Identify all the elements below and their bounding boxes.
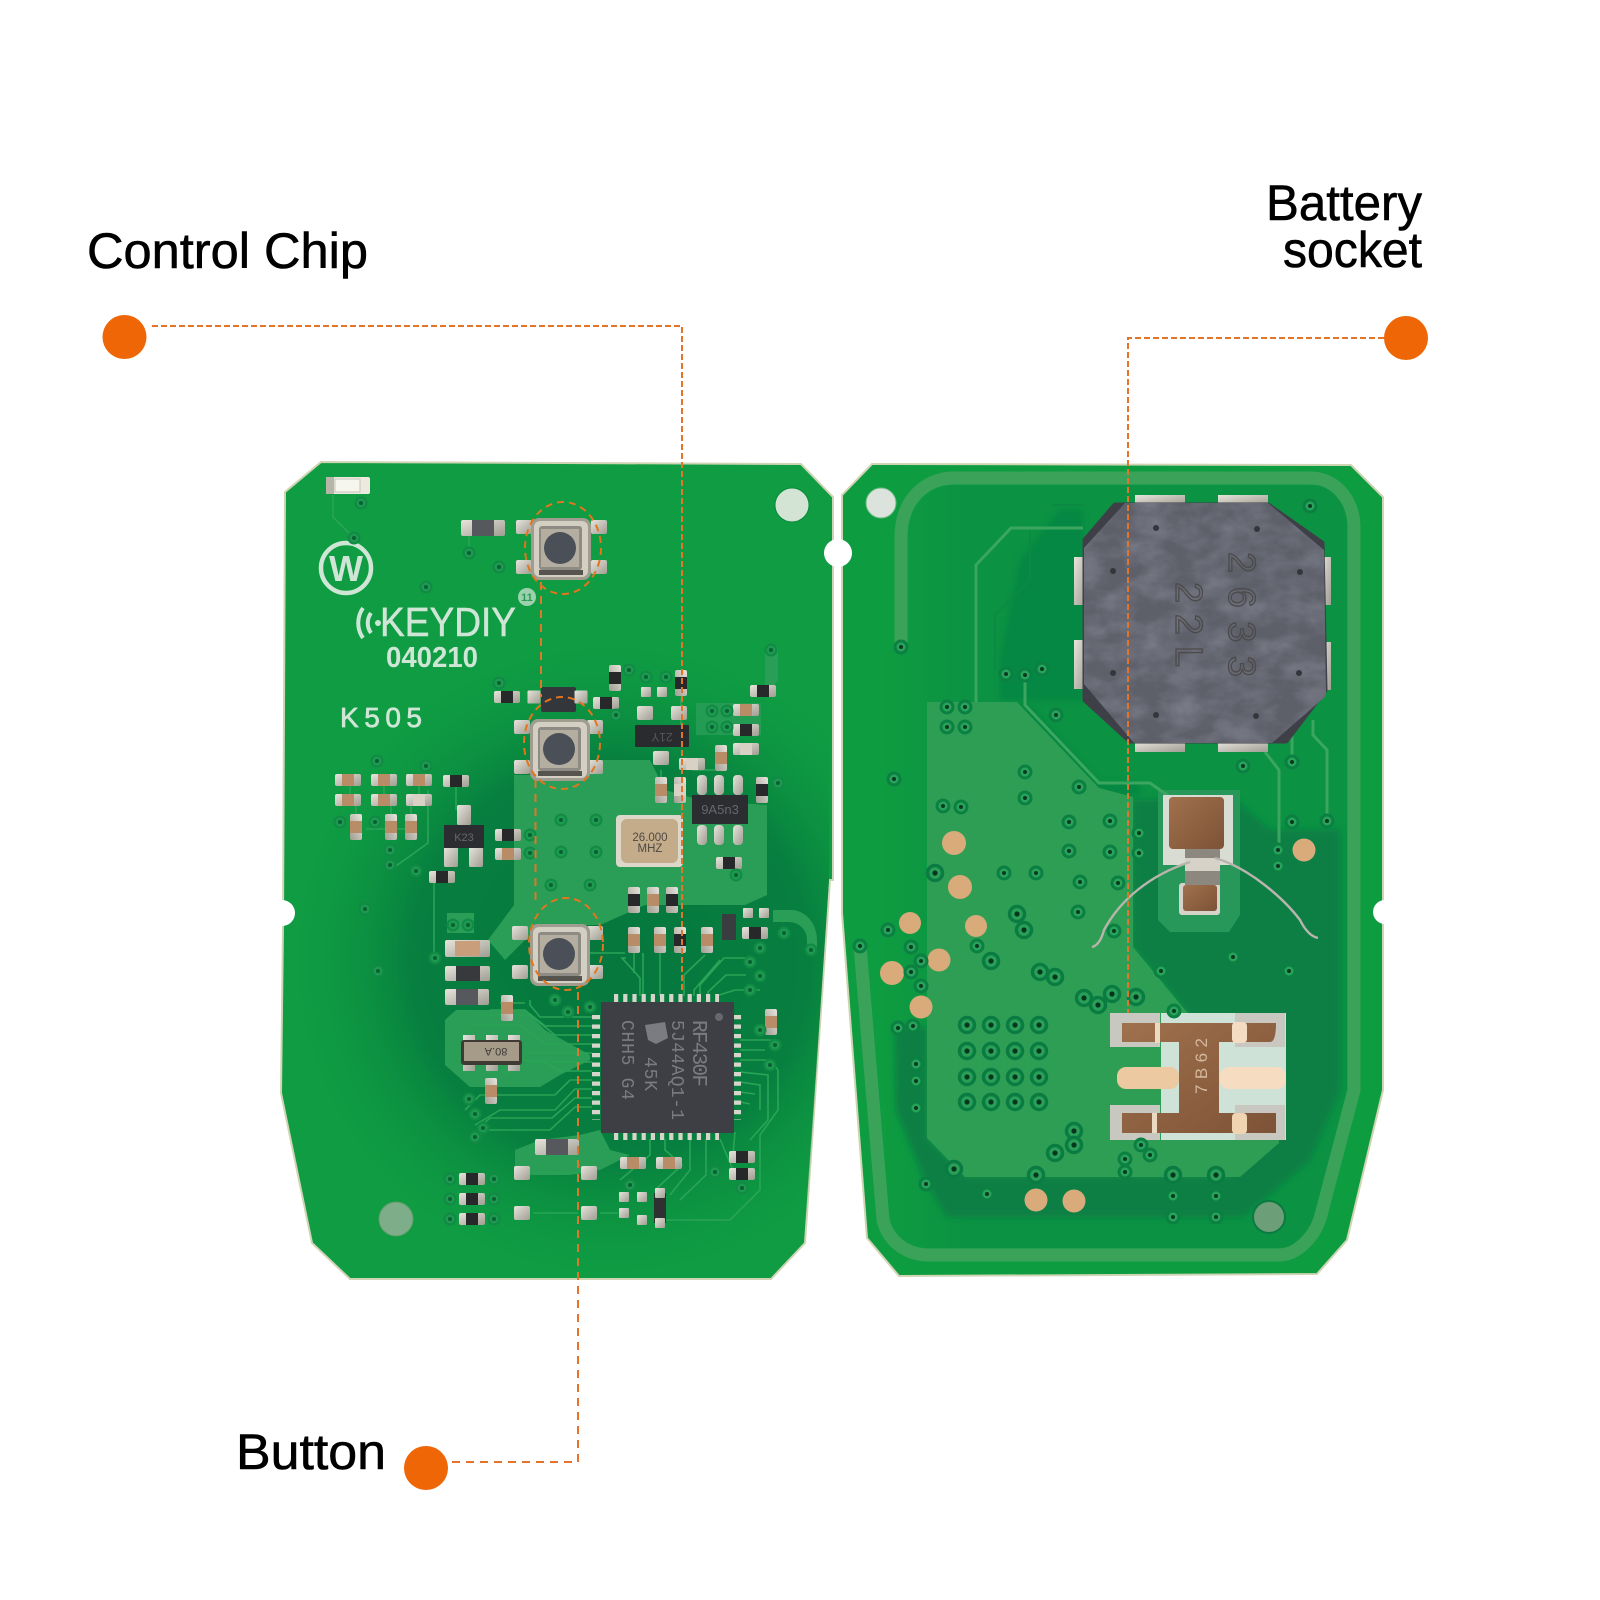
logo KEYDIY: 11: [521, 592, 533, 604]
model name K505: K505: [340, 702, 422, 733]
copper pour back: [927, 702, 1279, 1177]
battery cover: 2633: [1220, 552, 1262, 677]
hole top left: [866, 488, 896, 518]
dark copper shading: [283, 464, 831, 1277]
oscillator chip 9A5n3: 9A5n3: [701, 802, 739, 817]
copper pour areas: [445, 644, 817, 1175]
traces front: [333, 495, 778, 1220]
label: battery socket: Battery: [1266, 175, 1422, 231]
model number 040210: 040210: [386, 642, 478, 674]
logo W: W: [329, 548, 363, 589]
dot: button: [404, 1446, 448, 1490]
outer antenna track: [860, 478, 1354, 1255]
button 3: [512, 924, 603, 986]
label: battery socket: socket: [1283, 222, 1422, 278]
small crystal 80.A: 80.A: [484, 1045, 507, 1057]
via grid: [960, 1018, 1046, 1110]
battery cover: [1074, 495, 1331, 752]
label: control chip: Control Chip: [87, 223, 368, 279]
leader line: control chip: [152, 326, 682, 990]
dashed circles around buttons: [524, 502, 603, 990]
battery socket lower: 7B62: [1192, 1038, 1211, 1094]
dot: battery socket: [1384, 316, 1428, 360]
inner field: [866, 485, 1347, 1248]
logo KEYDIY: KEYDIY: [380, 599, 516, 645]
control chip RF430F: [596, 998, 737, 1136]
hole bottom right: [1253, 1201, 1285, 1233]
battery contact upper: [1092, 795, 1318, 947]
vias front: [334, 498, 816, 1224]
small crystal 80.A: [461, 1035, 522, 1071]
leader line: button links: [536, 582, 541, 905]
contact base pad: [1158, 790, 1240, 932]
board outline front: [281, 462, 833, 1279]
buttons: [512, 518, 607, 986]
battery socket lower: [1110, 1013, 1286, 1140]
crystal 26.000 MHZ: MHZ: [638, 843, 662, 855]
small components front: 21Y: [651, 730, 673, 744]
label: button: Button: [236, 1424, 386, 1480]
mounting holes front: [379, 488, 809, 1236]
mounting holes back: [866, 488, 1285, 1233]
small components front: [335, 520, 777, 1228]
board notches: [269, 539, 1397, 926]
button 2: [514, 719, 603, 781]
copper test points: [880, 831, 1316, 1212]
control chip RF430F: RF430F: [686, 1020, 709, 1087]
leader line: button: [452, 992, 578, 1462]
hole top right: [775, 488, 809, 522]
LED: [326, 477, 370, 494]
callout: control chip: [87, 223, 682, 990]
logo KEYDIY: [358, 588, 536, 645]
hole bottom left: [379, 1202, 413, 1236]
label: battery socket: [1266, 175, 1422, 278]
board outline back: [842, 464, 1383, 1276]
panel: circuit board front: [281, 462, 833, 1279]
battery cover: 22L: [1167, 582, 1209, 667]
dark copper regions back: [895, 510, 1340, 1217]
panel: circuit board back: [842, 464, 1383, 1276]
crystal 26.000 MHZ: [616, 815, 683, 867]
button 1: [516, 518, 607, 580]
vias back: [854, 500, 1333, 1223]
callout: battery socket: [1128, 175, 1428, 1013]
dot: control chip: [102, 315, 146, 359]
small components front: K23: [454, 832, 474, 844]
crystal 26.000 MHZ: 26.000: [632, 832, 668, 844]
control chip RF430F: 5J44AQ1-1: [666, 1020, 686, 1120]
leader line: battery socket: [1128, 338, 1384, 1013]
logo W: [321, 543, 371, 593]
oscillator chip 9A5n3: [692, 775, 748, 845]
control chip RF430F: CHH5 G4: [616, 1020, 636, 1100]
control chip RF430F: 45K: [639, 1057, 659, 1091]
callout: button: [236, 582, 578, 1490]
traces back: [976, 505, 1327, 850]
